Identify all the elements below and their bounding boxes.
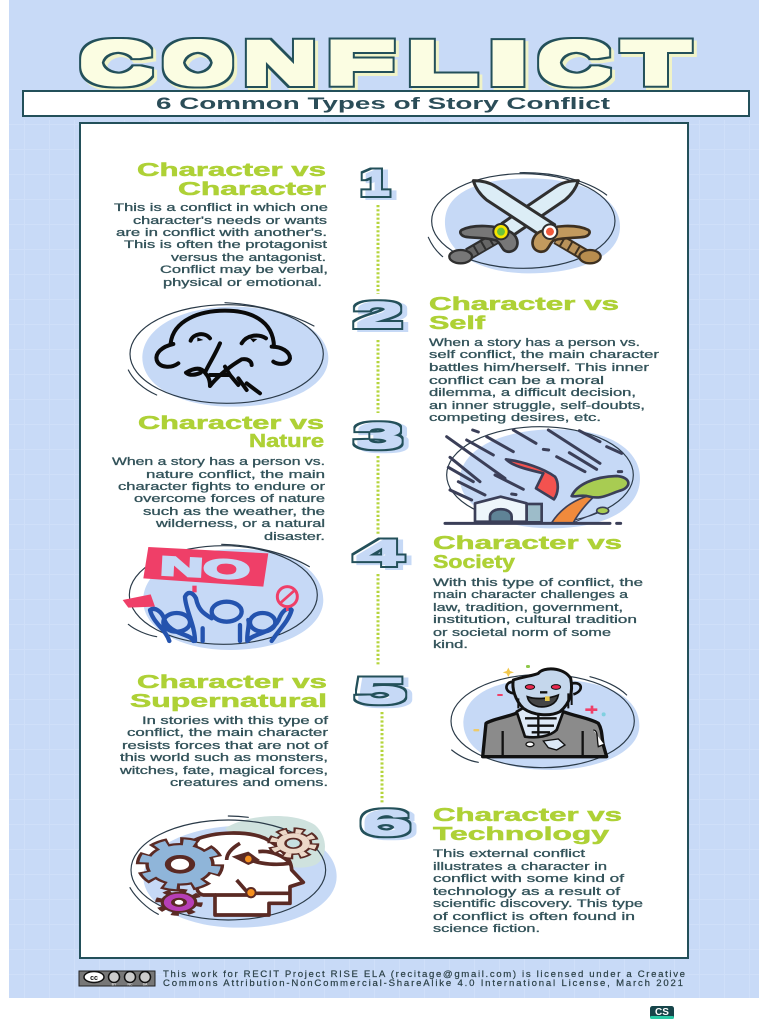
subtitle banner: [23, 91, 749, 116]
panel: character vs supernatural text: resists forces that are not of: [122, 740, 330, 752]
panel: character vs technology text: science fiction.: [433, 923, 540, 935]
panel: character vs nature text: disaster.: [264, 531, 325, 543]
panel: character vs society text: Character vs: [433, 533, 622, 553]
panel: character vs nature text: When a story has a person vs.: [112, 456, 325, 468]
number 3: 3: [353, 417, 404, 456]
panel: character vs self text: Character vs: [429, 294, 619, 314]
number 2: 2: [352, 296, 404, 335]
panel: character vs technology text: scientific discovery. This type: [433, 898, 643, 910]
panel: character vs society text: Society: [433, 552, 515, 572]
icon: zombie: [451, 665, 639, 770]
icon: crossed swords: [428, 173, 620, 273]
panel: character vs self text: an inner struggle, self-doubts,: [429, 400, 645, 412]
title: C: [538, 31, 610, 96]
panel: character vs character text: character's needs or wants: [133, 215, 328, 227]
license text: This work for RECIT Project RISE ELA (recitage@gmail.com) is licensed under a Creative: [163, 969, 685, 980]
panel: character vs character text: This is often the protagonist: [124, 239, 327, 251]
title: L: [406, 31, 478, 96]
panel: character vs supernatural text: Supernatural: [130, 691, 327, 711]
license text: [163, 969, 685, 989]
panel: character vs technology text: Character vs: [433, 805, 622, 825]
panel: character vs supernatural text: [118, 672, 330, 789]
title: N: [243, 31, 317, 96]
panel: character vs society text: institution, cultural tradition: [433, 614, 637, 626]
number 4: 4: [353, 534, 405, 573]
icon: protest: [123, 544, 323, 650]
subtitle banner: 6 Common Types of Story Conflict: [156, 95, 611, 113]
panel: character vs self text: battles him/herself. This inner: [429, 362, 650, 374]
panel: character vs society text: [433, 533, 643, 651]
number 5: 5: [353, 672, 407, 711]
license badge: BY: [112, 982, 117, 986]
number 6: 6: [359, 804, 412, 843]
panel: character vs technology text: illustrates a character in: [433, 861, 607, 873]
panel: character vs supernatural text: witches, fate, magical forces,: [118, 765, 328, 777]
panel: character vs character text: Character vs: [137, 160, 326, 180]
panel: character vs nature text: such as the weather, the: [143, 506, 325, 518]
timeline dotted connectors: [378, 205, 382, 803]
license badge: SA: [143, 982, 148, 986]
panel: character vs self text: When a story has a person vs.: [429, 337, 640, 349]
panel: character vs society text: main character challenges a: [433, 589, 628, 601]
panel: character vs supernatural text: Character vs: [137, 672, 327, 692]
panel: character vs nature text: nature conflict, the main: [146, 469, 325, 481]
panel: character vs technology text: technology as a result of: [433, 886, 622, 898]
icon: storm: [445, 427, 640, 528]
panel: character vs society text: kind.: [433, 639, 468, 651]
number 1: 1: [360, 164, 390, 203]
panel: character vs technology text: Technology: [433, 824, 609, 844]
panel: character vs supernatural text: creatures and omens.: [170, 777, 328, 789]
panel: character vs character text: physical or emotional.: [163, 277, 322, 289]
panel: character vs character text: Conflict may be verbal,: [160, 264, 328, 276]
icon: robot head and gears: [130, 816, 337, 928]
panel: character vs nature text: wilderness, or a natural: [154, 518, 325, 530]
title: O: [163, 31, 233, 96]
panel: character vs technology text: This external conflict: [433, 848, 585, 860]
panel: character vs character text: [114, 160, 328, 289]
icon: CS scanner logo: [650, 1006, 674, 1019]
panel: character vs technology text: [433, 805, 643, 935]
title: C: [80, 31, 152, 96]
panel: character vs technology text: conflict with some kind of: [433, 873, 626, 885]
panel: character vs character text: Character: [178, 179, 326, 199]
icon: thinking face: [128, 303, 328, 407]
license text: Commons Attribution-NonCommercial-ShareAlike 4.0 International License, March 2021: [163, 978, 683, 989]
title: I: [484, 31, 532, 96]
panel: character vs self text: self conflict, the main character: [429, 349, 660, 361]
license badge: cc: [90, 975, 98, 982]
panel: character vs character text: versus the antagonist.: [171, 252, 326, 264]
license badge: [79, 971, 155, 986]
panel: character vs nature text: Character vs: [138, 413, 324, 433]
icon: protest: NO: [159, 551, 251, 585]
panel: character vs nature text: character fights to endure or: [118, 481, 326, 493]
panel: character vs supernatural text: In stories with this type of: [142, 715, 330, 727]
panel: character vs nature text: overcome forces of nature: [134, 493, 325, 505]
panel: character vs character text: This is a conflict in which one: [114, 202, 328, 214]
panel: character vs nature text: [112, 413, 326, 543]
panel: character vs self text: Self: [429, 313, 487, 333]
panel: character vs self text: competing desires, etc.: [429, 412, 601, 424]
license badge: NC: [127, 982, 133, 986]
title: F: [326, 31, 395, 96]
panel: character vs nature text: Nature: [249, 431, 324, 451]
panel: character vs society text: law, tradition, government,: [433, 602, 623, 614]
title: T: [622, 31, 690, 96]
icon: CS scanner logo: CS: [655, 1007, 669, 1018]
panel: character vs self text: conflict can be a moral: [429, 375, 604, 387]
main white panel: [80, 123, 688, 958]
panel: character vs self text: [429, 294, 660, 424]
panel: character vs character text: are in conflict with another's.: [116, 227, 327, 239]
panel: character vs supernatural text: this world such as monsters,: [120, 752, 328, 764]
panel: character vs self text: dilemma, a difficult decision,: [429, 387, 636, 399]
panel: character vs society text: or societal norm of some: [433, 627, 611, 639]
panel: character vs society text: With this type of conflict, the: [433, 577, 643, 589]
panel: character vs supernatural text: conflict, the main character: [127, 727, 329, 739]
panel: character vs technology text: of conflict is often found in: [433, 911, 635, 923]
